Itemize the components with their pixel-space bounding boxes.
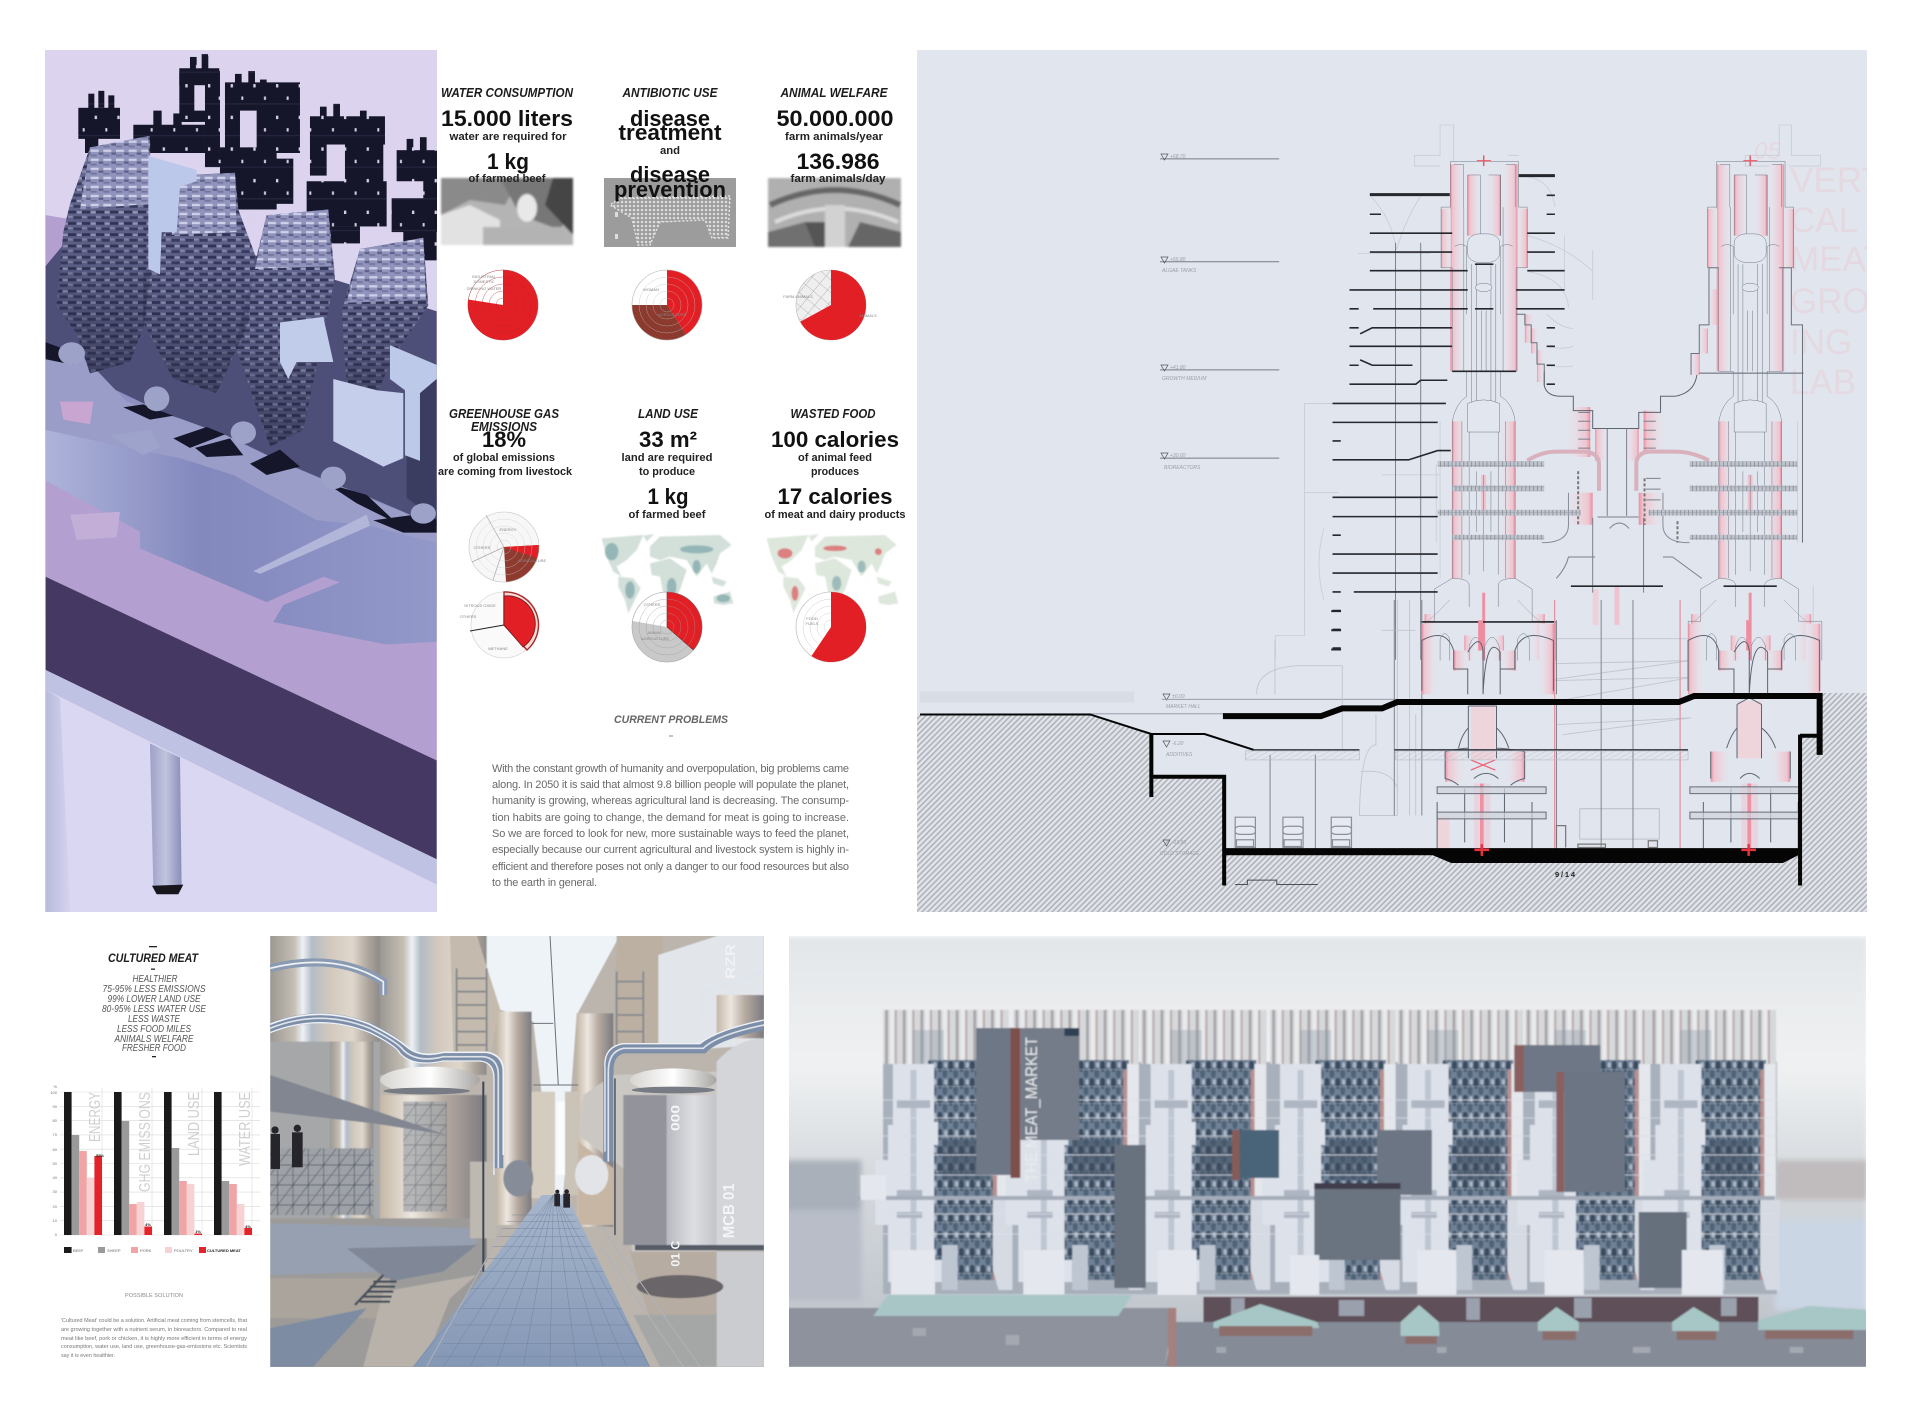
people xyxy=(271,1125,570,1208)
stat text xyxy=(614,106,726,202)
group: energy: 55% xyxy=(96,1153,104,1158)
bar chart: comparison: 60 xyxy=(53,1147,58,1152)
sky and distant landscape xyxy=(770,936,1868,1367)
stat text: 50.000.000 xyxy=(776,106,894,131)
paragraph: current problems: efficient and therefore poses not only a danger to our food resources but also xyxy=(492,861,849,873)
pie chart: land: AGRICULTURE xyxy=(641,636,670,641)
stat text: land are required xyxy=(622,452,712,464)
pie chart: food xyxy=(796,592,866,662)
ladders xyxy=(457,968,643,1052)
ghost title text: 05 xyxy=(1754,138,1781,165)
list of benefits: ANIMALS WELFARE xyxy=(114,1033,194,1045)
ghost outlines xyxy=(1275,125,1820,660)
lower building section xyxy=(920,600,1820,886)
building clusters xyxy=(57,136,152,373)
level annotations: -19.80 xyxy=(1172,840,1186,846)
group: GHG emissions: 4% xyxy=(145,1222,151,1227)
tank lettering: 000 xyxy=(668,1105,682,1131)
ground hatch xyxy=(917,693,1867,912)
stat text: 1 kg xyxy=(648,484,688,509)
block: wasted food xyxy=(764,406,906,662)
floor tiles xyxy=(413,1195,650,1367)
upper building section xyxy=(1160,125,1822,660)
stat text: disease xyxy=(630,162,710,187)
stat text: 33 m² xyxy=(639,427,697,452)
paragraph: current problems: humanity is growing, whereas agricultural land is decreasing. The consump- xyxy=(492,795,849,807)
block: antibiotic use xyxy=(604,85,736,340)
group: land use xyxy=(164,1092,203,1235)
foreground roofs and plaza xyxy=(770,1295,1868,1367)
heading: GREENHOUSE GAS xyxy=(449,406,559,421)
pie chart: water: DRINKING WATER xyxy=(467,286,501,291)
pie chart: animals: ANIMALS xyxy=(859,313,877,318)
heading: WASTED FOOD xyxy=(790,406,876,421)
list of benefits: HEALTHIER xyxy=(132,973,178,985)
paragraph: current problems: along. In 2050 it is said that almost 9.8 billion people will populate the planet, xyxy=(492,779,849,791)
level annotations: +55.80 xyxy=(1170,257,1186,263)
image: cow drinking xyxy=(441,178,573,245)
stat text: and xyxy=(660,145,680,157)
bar chart: comparison: 30 xyxy=(53,1189,58,1194)
ghost title text xyxy=(1754,138,1903,402)
bar chart: comparison: 90 xyxy=(53,1104,58,1109)
group: energy: ENERGY xyxy=(87,1092,104,1142)
level annotations xyxy=(1160,154,1207,857)
building lettering: THE MEAT_MARKET xyxy=(1022,1037,1041,1182)
bar chart: comparison: 40 xyxy=(53,1175,58,1180)
caption: possible solution: POSSIBLE SOLUTION xyxy=(125,1293,183,1299)
ghost title text: ING xyxy=(1790,323,1852,362)
stat text: of meat and dairy products xyxy=(764,509,906,521)
stat text: water are required for xyxy=(448,131,567,143)
tank lettering: MCB 01 xyxy=(721,1183,738,1238)
level annotations: ±0.00 xyxy=(1172,694,1185,700)
stat text: 136.986 xyxy=(796,149,880,174)
bar chart: comparison: 0 xyxy=(55,1232,58,1237)
paragraph: possible solution xyxy=(61,1318,247,1359)
level annotations: COLD STORAGE xyxy=(1160,851,1200,857)
right masses xyxy=(658,935,764,1052)
legend xyxy=(64,1247,241,1253)
pie chart: animals: FARM ANIMALS xyxy=(783,294,813,299)
block: animal welfare xyxy=(768,85,901,340)
heading: ANTIBIOTIC USE xyxy=(622,85,718,100)
group: land use: LAND USE xyxy=(186,1092,203,1156)
pie chart: land xyxy=(632,592,702,662)
pie chart: livestock emissions xyxy=(460,592,538,658)
bar chart: comparison: 80 xyxy=(53,1118,58,1123)
level annotations: MARKET HALL xyxy=(1166,704,1201,710)
ghost structure xyxy=(1257,600,1691,839)
backdrop and metallic tanks xyxy=(270,935,767,1368)
map: land use xyxy=(602,534,733,613)
caption: current problems: CURRENT PROBLEMS xyxy=(614,714,729,726)
paragraph: possible solution: 'Cultured Meat' could be a solution. Artificial meat coming from stemcells, that xyxy=(61,1318,247,1324)
heading: LAND USE xyxy=(638,406,698,421)
stat text: of animal feed xyxy=(798,452,872,464)
pale solid blocks xyxy=(148,156,197,274)
stat text: of farmed beef xyxy=(628,509,706,521)
pie chart: water: INDUSTRIAL xyxy=(472,274,497,279)
legend: POULTRY xyxy=(174,1248,193,1253)
pie chart: livestock emissions: OTHERS xyxy=(460,614,477,619)
solid dark blocks xyxy=(976,1028,1687,1288)
pie chart: emissions by sector: AGRICULTURE xyxy=(518,558,547,563)
list of benefits: LESS FOOD MILES xyxy=(117,1023,191,1035)
bar chart: comparison: 70 xyxy=(53,1132,58,1137)
pie chart: livestock emissions: METHANE xyxy=(488,646,508,651)
level annotations: ADDITIVES xyxy=(1165,752,1193,758)
ghost title text: CAL xyxy=(1790,201,1858,240)
level lines xyxy=(1160,159,1279,458)
building feet xyxy=(58,342,436,524)
floor plates left xyxy=(1333,176,1777,648)
table surface xyxy=(46,215,437,760)
group: energy xyxy=(64,1092,104,1235)
pie chart: land: OTHERS xyxy=(644,602,661,607)
pipes and walkway rails xyxy=(270,935,764,1367)
bar chart: comparison xyxy=(50,1084,260,1253)
heading xyxy=(449,406,559,434)
bar chart: comparison: 50 xyxy=(53,1161,58,1166)
stat text: 15.000 liters xyxy=(441,106,573,131)
pie chart: antibiotics xyxy=(632,270,702,340)
paragraph: current problems: So we are forced to look for new, more sustainable ways to feed the planet, xyxy=(492,828,849,840)
lower white bases xyxy=(861,1175,1723,1295)
list of benefits: 99% LOWER LAND USE xyxy=(108,993,201,1005)
pie chart: food: FOOD xyxy=(806,616,818,621)
panel: exterior render of the building xyxy=(789,936,1866,1367)
pie chart: livestock emissions: NITROUS OXIDE xyxy=(464,603,496,608)
pie chart: antibiotics: AGRICULTURE xyxy=(658,312,687,317)
towers xyxy=(1422,155,1555,660)
stat text: of global emissions xyxy=(453,452,555,464)
block: land use xyxy=(602,406,733,662)
stub floors over slab xyxy=(1331,611,1341,649)
stat text: prevention xyxy=(614,177,726,202)
group: water use: 4% xyxy=(245,1224,251,1229)
paragraph: current problems: to the earth in general. xyxy=(492,877,597,889)
heading: WATER CONSUMPTION xyxy=(441,85,574,100)
table edge dark band xyxy=(46,577,437,859)
thick black slabs and walls xyxy=(920,696,1820,886)
group: land use: 1% xyxy=(195,1229,201,1234)
stat text xyxy=(622,427,712,521)
central connection xyxy=(1527,371,1709,625)
level annotations: +30.60 xyxy=(1170,453,1186,459)
level annotations: -6.20 xyxy=(1172,741,1184,747)
paragraph: possible solution: meat like beef, pork or chicken, it is highly more efficient in terms of energy xyxy=(61,1336,247,1342)
vertical structure lines xyxy=(1396,243,1421,660)
stat text: to produce xyxy=(639,466,695,478)
additives level floor xyxy=(1246,750,1688,760)
tank lettering: 01 C xyxy=(668,1240,682,1267)
stat text: of farmed beef xyxy=(468,173,546,185)
pie chart: water xyxy=(467,270,538,340)
paragraph: possible solution: say it is even healthier. xyxy=(61,1353,115,1359)
dark gaps in the base plate xyxy=(46,342,437,533)
bar chart: comparison: 20 xyxy=(53,1204,58,1209)
stat text: 100 calories xyxy=(771,427,899,452)
pie chart: emissions by sector xyxy=(469,512,547,582)
vertical lines xyxy=(1270,600,1633,849)
stat text xyxy=(438,427,573,478)
heading: EMISSIONS xyxy=(471,419,537,434)
group: water use xyxy=(214,1092,254,1235)
list of benefits: 80-95% LESS WATER USE xyxy=(102,1003,207,1015)
level annotations: ALGAE TANKS xyxy=(1161,268,1197,274)
bar chart: comparison: 10 xyxy=(53,1218,58,1223)
pie chart: animals xyxy=(783,270,877,340)
list of benefits xyxy=(102,973,207,1057)
disc platforms xyxy=(380,1067,717,1094)
stat text: 17 calories xyxy=(778,484,892,509)
axis and grid xyxy=(60,1088,260,1236)
pie chart: antibiotics: WOMAN xyxy=(643,287,659,292)
group: water use: WATER USE xyxy=(237,1092,254,1166)
pie chart: emissions by sector: ENERGY xyxy=(500,527,517,532)
pie chart: emissions by sector: OTHERS xyxy=(474,545,491,550)
level annotations: GROWTH MEDIUM xyxy=(1162,376,1207,382)
page number: 9/14 xyxy=(1555,870,1576,879)
heading: cultured meat: CULTURED MEAT xyxy=(108,951,199,965)
stairs xyxy=(355,1275,397,1305)
list of benefits: FRESHER FOOD xyxy=(122,1042,186,1054)
list of benefits: LESS WASTE xyxy=(128,1013,181,1025)
grey bands xyxy=(1438,461,1797,540)
paragraph: possible solution: consumption, water use, land use, greenhouse-gas-emissions etc. Scientists xyxy=(61,1344,247,1350)
group: GHG emissions: GHG EMISSIONS xyxy=(137,1092,154,1192)
building modules xyxy=(859,1010,1780,1295)
group: GHG emissions xyxy=(114,1092,154,1235)
image: rotary milking parlour xyxy=(768,178,901,247)
panel: interior render of the bioreactor corridor xyxy=(270,936,764,1367)
stat text: 18% xyxy=(482,427,526,452)
pie chart: land: ANIMAL xyxy=(648,630,663,635)
level annotations: +41.80 xyxy=(1170,365,1186,371)
pie chart: water: DOMESTIC xyxy=(473,279,495,284)
stat text: 1 kg xyxy=(487,149,529,174)
tank lettering: RZR xyxy=(722,944,738,979)
trucks in cold storage xyxy=(1235,817,1351,847)
stat text: treatment xyxy=(618,120,722,145)
red crosses xyxy=(1474,844,1756,856)
voxel rooftop clusters xyxy=(78,54,438,260)
legend: CULTURED MEAT xyxy=(207,1248,241,1253)
image: dotted cow xyxy=(604,178,736,247)
panel: photo of the architectural model xyxy=(45,50,437,912)
tank lettering xyxy=(668,944,738,1267)
paragraph: current problems: tion habits are going to change, the demand for meat is going to increase. xyxy=(492,812,849,824)
heading: ANIMAL WELFARE xyxy=(780,85,888,100)
left lower levels xyxy=(380,1095,487,1262)
stat text xyxy=(776,106,894,185)
panel: building section drawing xyxy=(917,50,1867,912)
legend: SHEEP xyxy=(107,1248,121,1253)
basement shafts xyxy=(1437,706,1546,849)
stat text: are coming from livestock xyxy=(438,466,573,478)
pie chart: food: FUELS xyxy=(806,621,819,626)
stat text: disease xyxy=(630,106,710,131)
paragraph: current problems xyxy=(492,763,849,889)
stat text: farm animals/day xyxy=(790,173,886,185)
bar chart: comparison: % xyxy=(53,1084,57,1089)
right tower top-line xyxy=(1699,372,1803,374)
stat text xyxy=(764,427,906,521)
caption: current problems xyxy=(614,714,729,736)
paragraph: current problems: With the constant growth of humanity and overpopulation, big problems came xyxy=(492,763,849,775)
table legs xyxy=(46,690,71,921)
paragraph: possible solution: are growing together with a nutrient serum, in bioreactors. Compared to real xyxy=(61,1327,247,1333)
upper arches above slab xyxy=(1422,620,1820,694)
block: greenhouse gas emissions xyxy=(438,406,573,658)
panel: cultured meat solution xyxy=(45,930,270,1380)
building underlay mass xyxy=(46,210,437,526)
legend: BEEF xyxy=(73,1248,84,1253)
ground-level ghost strip xyxy=(920,692,1397,714)
bar chart: comparison: 100 xyxy=(50,1090,58,1095)
block: water consumption xyxy=(441,85,574,340)
list of benefits: 75-95% LESS EMISSIONS xyxy=(102,983,206,995)
scale bar xyxy=(1235,880,1318,885)
map: wasted food xyxy=(767,534,898,613)
stat text: farm animals/year xyxy=(785,131,884,143)
level annotations: +68.70 xyxy=(1170,154,1186,160)
legend: PORK xyxy=(140,1248,152,1253)
paragraph: current problems: especially because our current agricultural and livestock system is highly in- xyxy=(492,844,849,856)
equipment xyxy=(1556,826,1657,847)
stepped flanks of the towers xyxy=(1516,268,1802,543)
ghost title text: LAB xyxy=(1790,363,1856,402)
heading: cultured meat xyxy=(108,946,199,970)
stat text xyxy=(441,106,573,185)
level annotations: BIOREACTORS xyxy=(1164,465,1201,471)
panel: current problems statistics xyxy=(437,50,917,912)
stat text: produces xyxy=(811,466,859,478)
